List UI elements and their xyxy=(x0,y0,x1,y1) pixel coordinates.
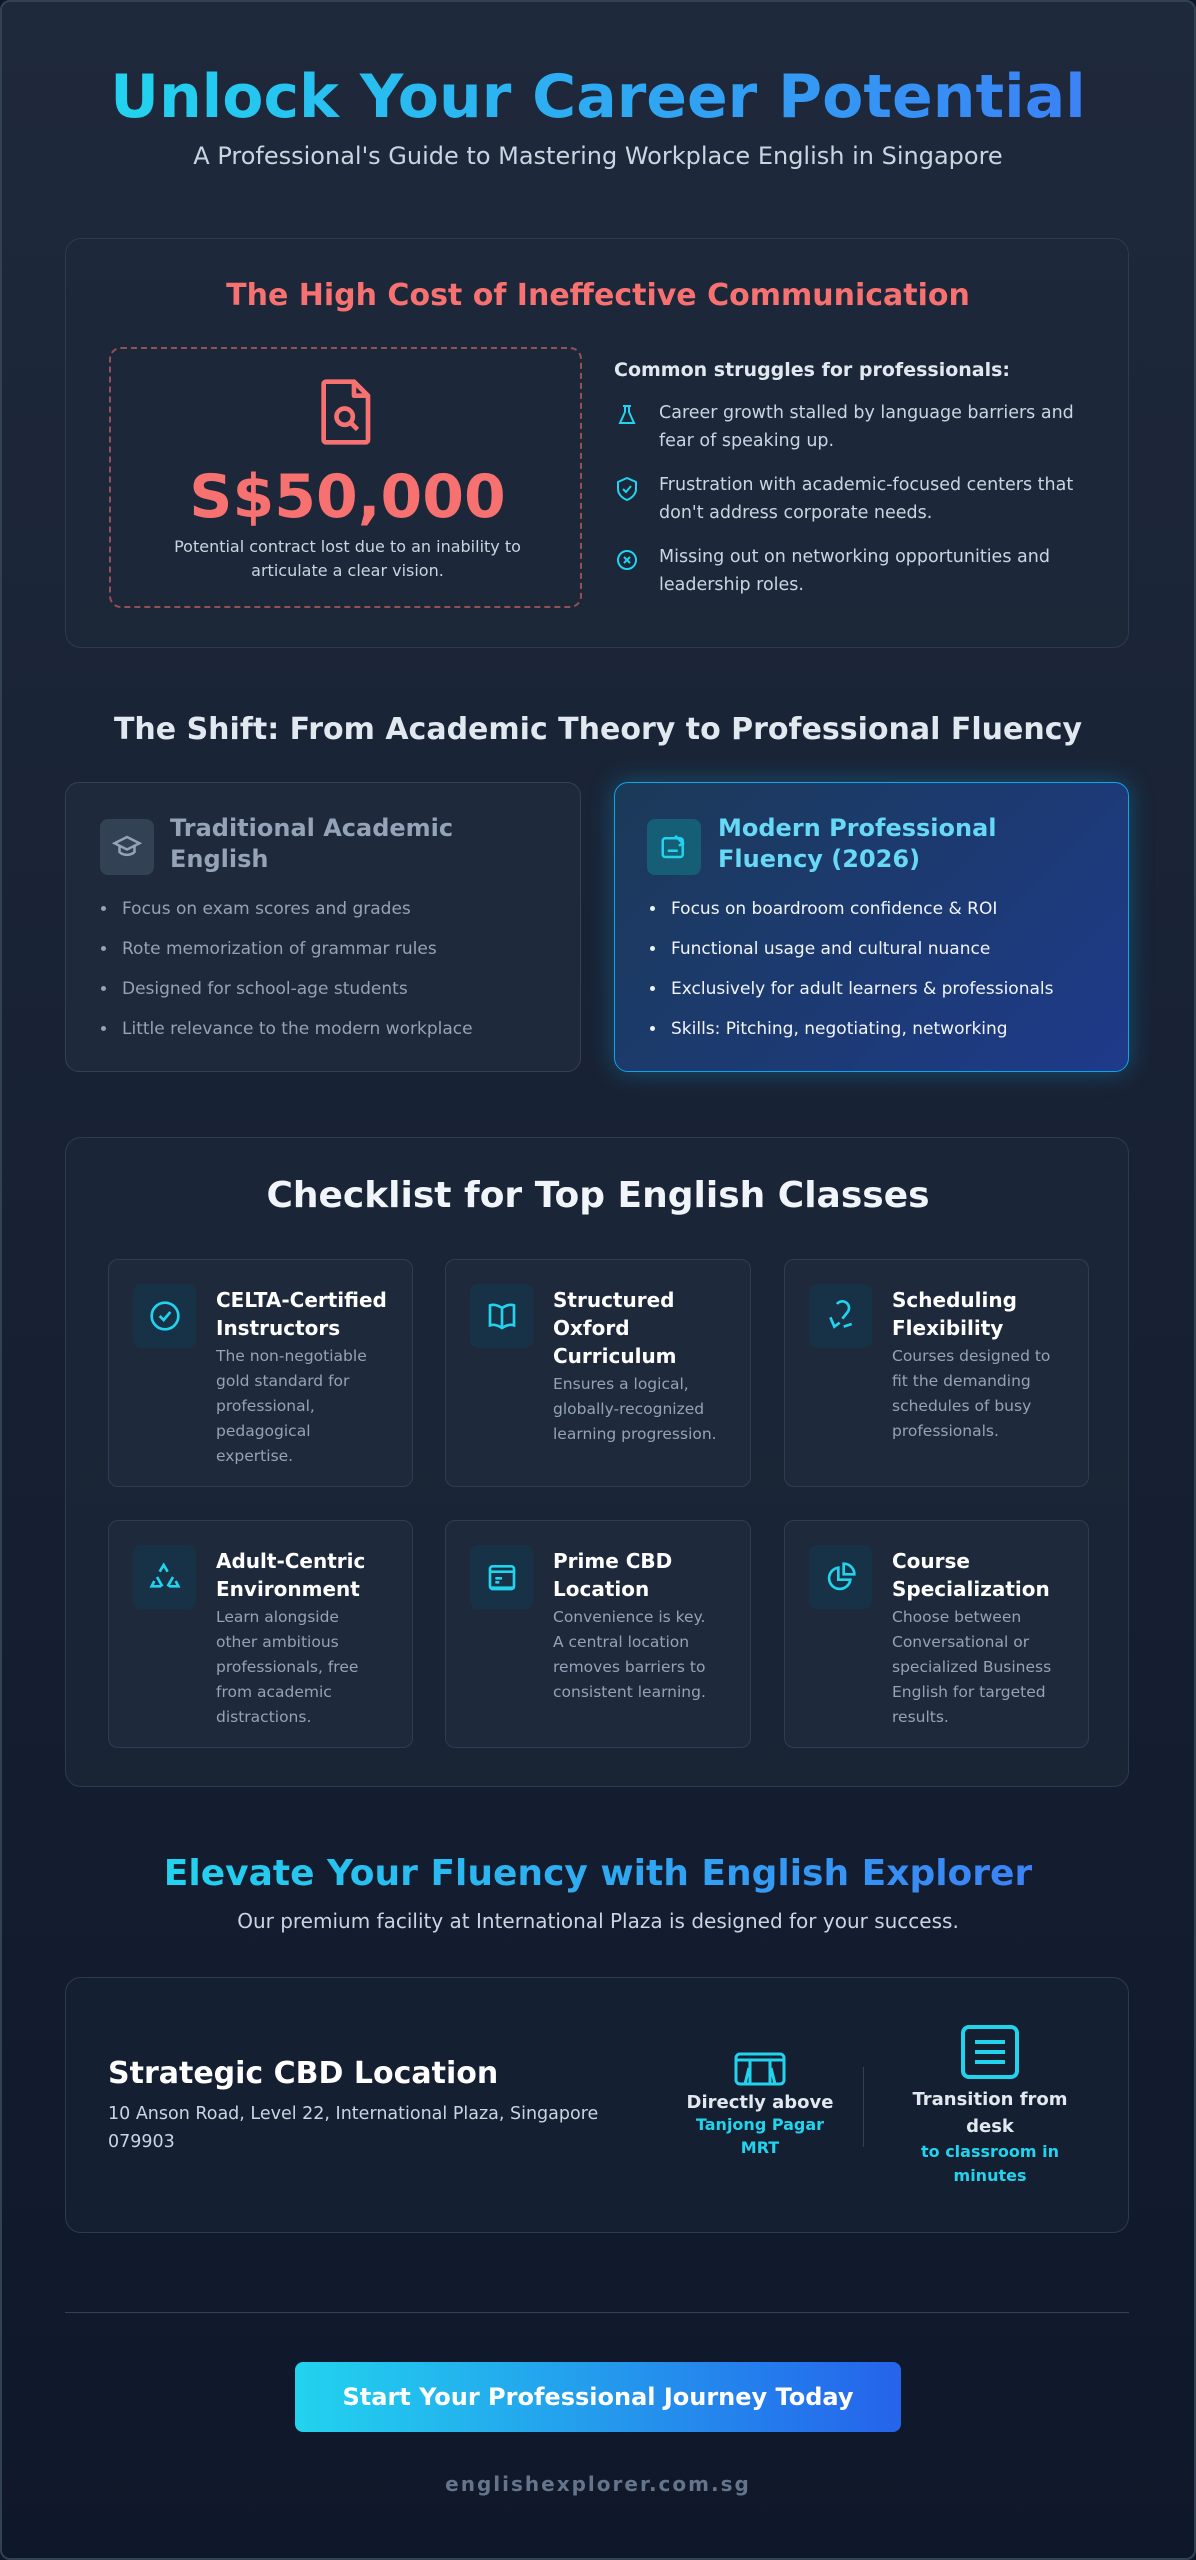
item: career growth xyxy=(618,403,1074,451)
panel: high cost: Frustration with academic-focused centers that xyxy=(659,475,1073,495)
stat: S$50,000: S$50,000 xyxy=(189,462,506,532)
card: CELTA: CELTA-Certified xyxy=(216,1288,387,1312)
icon: pie chart xyxy=(809,1545,872,1609)
item: networking xyxy=(617,547,1050,595)
card: scheduling: Scheduling xyxy=(892,1288,1017,1312)
card: scheduling: schedules of busy xyxy=(892,1397,1031,1415)
subtitle: elevate: Our premium facility at International Plaza is designed for your success. xyxy=(237,1909,959,1933)
card: prime CBD xyxy=(445,1520,751,1748)
card: adult-centric: Environment xyxy=(216,1577,360,1601)
list: common struggles: Common struggles for professionals: xyxy=(614,359,1010,381)
card: specialization: Choose between xyxy=(892,1608,1021,1626)
icon: presentation xyxy=(647,819,701,875)
list: traditional bullets: Rote memorization of grammar rules xyxy=(122,939,437,959)
card: scheduling: Flexibility xyxy=(892,1316,1003,1340)
heading: high cost: The High Cost of Ineffective Communication xyxy=(226,278,970,313)
heading: checklist: Checklist for Top English Classes xyxy=(266,1175,930,1216)
footer: website: englishexplorer.com.sg xyxy=(445,2472,751,2496)
card: adult-centric: Learn alongside xyxy=(216,1608,339,1626)
icon: check circle xyxy=(133,1284,196,1348)
feature: transition: minutes xyxy=(954,2166,1026,2185)
card: prime CBD: consistent learning. xyxy=(553,1683,706,1701)
card: prime CBD: Convenience is key. xyxy=(553,1608,705,1626)
card: adult-centric: professionals, free xyxy=(216,1658,358,1676)
card: CELTA: professional, xyxy=(216,1397,315,1415)
card: adult-centric: other ambitious xyxy=(216,1633,339,1651)
card: adult-centric: Adult-Centric xyxy=(216,1549,365,1573)
card: adult-centric xyxy=(108,1520,413,1748)
card: CELTA: expertise. xyxy=(216,1447,293,1465)
button: CTA xyxy=(295,2362,901,2432)
feature: transition: Transition from xyxy=(912,2089,1068,2110)
button: CTA: Start Your Professional Journey Today xyxy=(342,2383,854,2411)
divider xyxy=(863,2067,864,2147)
heading: traditional: English xyxy=(170,845,268,873)
text: address: 079903 xyxy=(108,2132,175,2152)
icon: train xyxy=(734,2052,786,2086)
card: prime CBD: removes barriers to xyxy=(553,1658,705,1676)
card: Oxford: Structured xyxy=(553,1288,674,1312)
list: common struggles xyxy=(614,359,1074,595)
text: stat caption: articulate a clear vision. xyxy=(251,561,444,580)
heading: traditional xyxy=(170,814,453,873)
heading: strategic location: Strategic CBD Location xyxy=(108,2056,498,2091)
heading: traditional: Traditional Academic xyxy=(170,814,453,842)
card: prime CBD: Prime CBD xyxy=(553,1549,672,1573)
list: traditional bullets: Focus on exam scores and grades xyxy=(122,899,411,919)
panel: location xyxy=(65,1977,1129,2233)
card: Oxford xyxy=(445,1259,751,1487)
feature: transition xyxy=(912,2025,1068,2185)
heading: modern xyxy=(718,814,997,873)
panel: high cost: leadership roles. xyxy=(659,575,804,595)
panel: modern professional xyxy=(614,782,1129,1072)
text: address: 10 Anson Road, Level 22, International Plaza, Singapore xyxy=(108,2104,598,2124)
subtitle: A Professional's Guide to Mastering Workplace English in Singapore xyxy=(193,142,1003,170)
list: modern bullets: Skills: Pitching, negotiating, networking xyxy=(671,1019,1008,1039)
heading: elevate: Elevate Your Fluency with English Explorer xyxy=(164,1853,1032,1894)
card: CELTA: pedagogical xyxy=(216,1422,311,1440)
card: CELTA: Instructors xyxy=(216,1316,340,1340)
callout: cost box xyxy=(109,347,582,608)
card: Oxford: globally-recognized xyxy=(553,1400,704,1418)
panel: high cost xyxy=(65,238,1129,648)
heading: the shift: The Shift: From Academic Theory to Professional Fluency xyxy=(114,712,1082,747)
icon: building xyxy=(470,1545,533,1609)
list: traditional bullets: Little relevance to the modern workplace xyxy=(122,1019,473,1039)
list: modern bullets xyxy=(650,899,1053,1039)
panel: high cost: don't address corporate needs. xyxy=(659,503,932,523)
card: Oxford: learning progression. xyxy=(553,1425,717,1443)
card: Oxford: Curriculum xyxy=(553,1344,677,1368)
card: specialization: specialized Business xyxy=(892,1658,1051,1676)
card: adult-centric: from academic xyxy=(216,1683,332,1701)
feature: MRT: MRT xyxy=(741,2138,779,2157)
list: modern bullets: Exclusively for adult learners & professionals xyxy=(671,979,1053,999)
card: specialization: results. xyxy=(892,1708,949,1726)
list: traditional bullets: Designed for school-age students xyxy=(122,979,408,999)
card: Oxford: Ensures a logical, xyxy=(553,1375,689,1393)
card: CELTA: The non-negotiable xyxy=(216,1347,367,1365)
card: CELTA: gold standard for xyxy=(216,1372,349,1390)
card: adult-centric: distractions. xyxy=(216,1708,311,1726)
text: stat caption xyxy=(174,537,521,580)
card: scheduling xyxy=(784,1259,1089,1487)
panel: traditional academic xyxy=(65,782,581,1072)
panel: high cost: Career growth stalled by language barriers and xyxy=(659,403,1074,423)
list: traditional bullets xyxy=(101,899,473,1039)
feature: transition: desk xyxy=(966,2116,1014,2137)
list: modern bullets: Functional usage and cultural nuance xyxy=(671,939,990,959)
panel: high cost: Missing out on networking opportunities and xyxy=(659,547,1050,567)
card: prime CBD: Location xyxy=(553,1577,649,1601)
card: scheduling: professionals. xyxy=(892,1422,999,1440)
icon: book xyxy=(470,1284,533,1348)
title: Unlock Your Career Potential xyxy=(110,62,1086,132)
list: modern bullets: Focus on boardroom confidence & ROI xyxy=(671,899,997,919)
icon: document search xyxy=(321,379,370,445)
feature: MRT xyxy=(686,2052,833,2157)
card: scheduling: Courses designed to xyxy=(892,1347,1050,1365)
divider line xyxy=(65,2312,1129,2313)
icon: recycle xyxy=(133,1545,196,1609)
text: address xyxy=(108,2104,598,2152)
card: specialization: Course xyxy=(892,1549,970,1573)
card: CELTA xyxy=(108,1259,413,1487)
item: frustration xyxy=(617,475,1073,523)
icon: arrows xyxy=(809,1284,872,1348)
icon: list xyxy=(961,2025,1019,2079)
card: Oxford: Oxford xyxy=(553,1316,630,1340)
card: specialization: Specialization xyxy=(892,1577,1050,1601)
heading: modern: Modern Professional xyxy=(718,814,997,842)
card: specialization xyxy=(784,1520,1089,1748)
card: prime CBD: A central location xyxy=(553,1633,689,1651)
card: scheduling: fit the demanding xyxy=(892,1372,1031,1390)
icon: academic cap xyxy=(100,819,154,875)
text: stat caption: Potential contract lost due to an inability to xyxy=(174,537,521,556)
panel: checklist xyxy=(65,1137,1129,1787)
panel: high cost: fear of speaking up. xyxy=(659,431,834,451)
heading: modern: Fluency (2026) xyxy=(718,845,920,873)
feature: transition: to classroom in xyxy=(921,2142,1059,2161)
card: specialization: English for targeted xyxy=(892,1683,1046,1701)
card: specialization: Conversational or xyxy=(892,1633,1029,1651)
feature: MRT: Tanjong Pagar xyxy=(696,2115,824,2134)
feature: MRT: Directly above xyxy=(686,2092,833,2113)
